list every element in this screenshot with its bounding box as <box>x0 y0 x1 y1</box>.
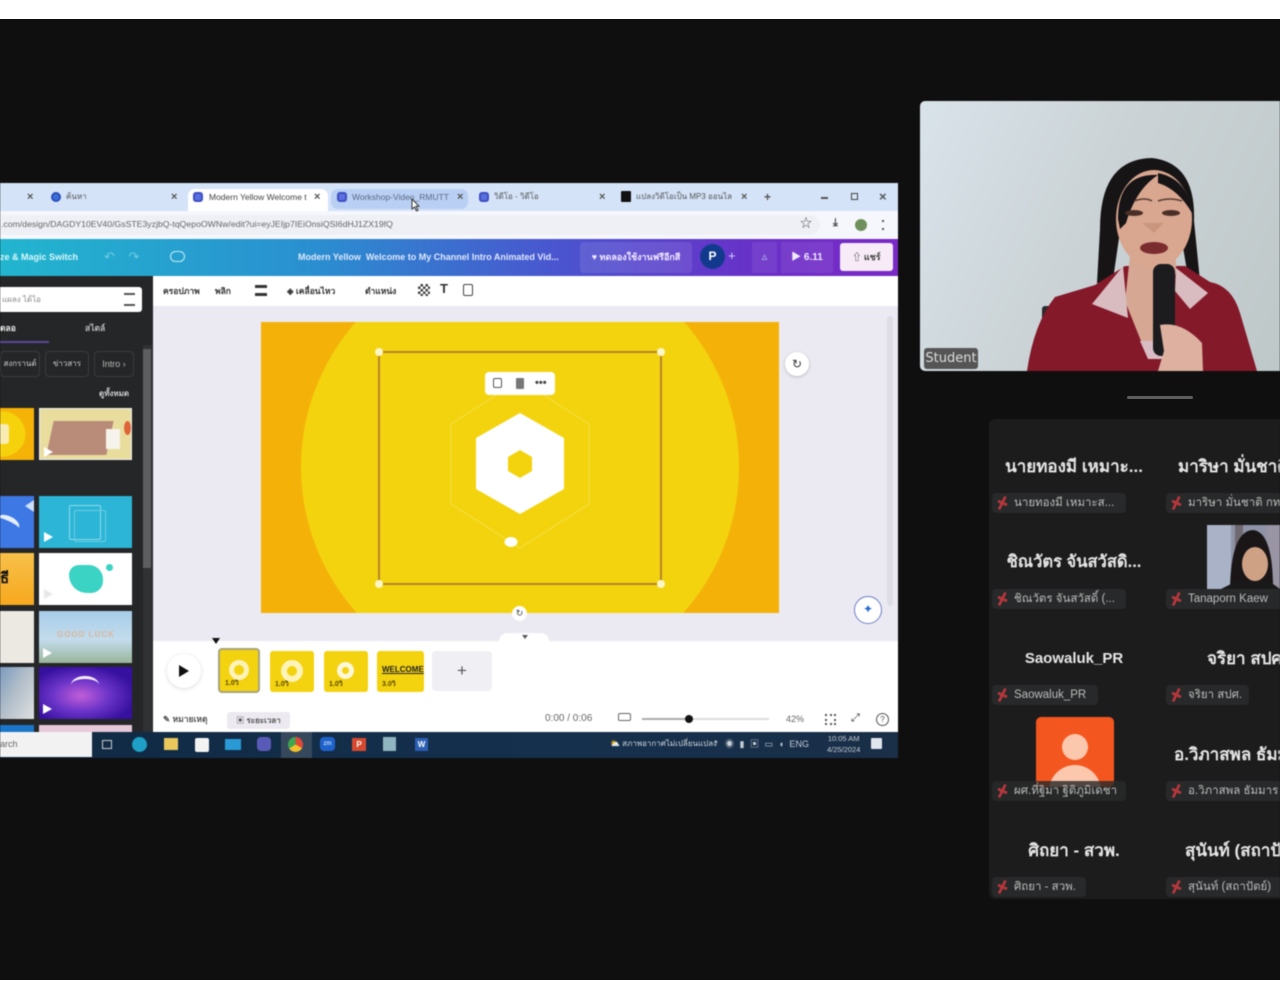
play mark <box>44 447 53 457</box>
play button <box>167 654 201 688</box>
tray icons: ⌃ ◉ ▮ ▣ ▭ ◖ ENG <box>712 739 809 749</box>
trash icon <box>516 378 524 389</box>
edge <box>132 737 147 752</box>
participant 8 <box>1166 745 1280 801</box>
design canvas <box>261 322 779 613</box>
notification icon <box>871 738 882 749</box>
tag: ศิถยา - สวพ. <box>1014 881 1076 893</box>
word: W <box>418 740 425 749</box>
chip: songkran <box>0 351 40 377</box>
powerpoint <box>352 738 366 751</box>
converter tab close: × <box>741 191 747 203</box>
sky title: GOOD LUCK <box>57 630 115 639</box>
menu dots <box>882 220 884 230</box>
selection box <box>378 351 662 585</box>
template: yellow <box>0 408 34 460</box>
template: purple <box>39 667 132 719</box>
tag <box>992 781 1126 801</box>
zoom knob <box>685 715 693 723</box>
section label: ดูทั้งหมด <box>99 389 129 398</box>
template: paper <box>0 611 34 663</box>
panel: participants <box>989 419 1280 899</box>
chip: news <box>45 351 89 377</box>
magic button: ✦ <box>863 602 873 616</box>
chart button: ▵ <box>762 251 767 263</box>
timeline <box>153 641 898 733</box>
avatar body <box>1049 765 1101 795</box>
tag <box>1166 877 1280 897</box>
taskbar <box>0 732 898 758</box>
zoom app: zm <box>324 741 332 747</box>
mail <box>225 739 241 750</box>
active tab icon <box>193 192 203 202</box>
floating toolbar <box>485 372 555 395</box>
hovered tab icon <box>337 192 347 202</box>
participant 2 <box>1166 453 1280 513</box>
chip: intro: Intro › <box>102 359 126 369</box>
page icon 3 <box>337 662 354 679</box>
red shape <box>124 421 131 435</box>
template: blue <box>0 496 34 548</box>
profile icon <box>855 219 867 231</box>
participant 1 <box>992 456 1143 513</box>
zoom percent: 42% <box>786 714 804 724</box>
avatar head <box>1062 734 1088 760</box>
rotate hint button <box>785 352 809 376</box>
filter icon <box>124 293 135 306</box>
speaker illustration <box>1026 157 1258 372</box>
participant 5 <box>992 650 1124 705</box>
active tab close: × <box>314 191 320 203</box>
chrome active <box>281 732 312 758</box>
hovered tab title: Workshop-Video_RMUTT <box>352 192 449 202</box>
clock: 4/25/2024 <box>827 745 860 754</box>
paint roller: T <box>440 281 448 296</box>
speaker name tag <box>924 348 978 369</box>
clock: 10:05 AM <box>828 734 860 743</box>
app <box>383 737 396 751</box>
tag <box>992 877 1086 897</box>
canvas scrollbar <box>887 316 893 606</box>
powerpoint: P <box>356 740 362 749</box>
context toolbar <box>153 276 898 306</box>
handle bottom right <box>657 580 665 588</box>
template: clouds <box>0 667 34 719</box>
lock icon <box>463 284 473 296</box>
tab title: converter: แปลงวิดีโอเป็น MP3 ออนไล <box>636 192 732 201</box>
active tab title: Modern Yellow Welcome t <box>209 192 307 202</box>
page icon 2 <box>281 660 303 682</box>
chip: songkran: สงกรานต์ <box>3 359 37 368</box>
tag: ผศ.ที่ฐิมา ฐิติภูมิเดชา <box>1014 785 1117 797</box>
lines icon <box>255 285 267 296</box>
participant 3 <box>992 552 1141 609</box>
panel: shared screen <box>0 183 898 758</box>
avatar <box>700 244 725 269</box>
template: photo <box>39 408 132 460</box>
teams <box>257 737 271 751</box>
corner mark <box>25 500 34 512</box>
scrollbar thumb <box>143 349 151 568</box>
tag: สุนันท์ (สถาปัตย์) <box>1188 881 1271 893</box>
tray weather: ⛅ สภาพอากาศไม่เปลี่ยนแปลง <box>610 739 717 748</box>
tag: ชิณวัตร จันสวัสดิ์ (... <box>1014 593 1115 605</box>
rotate handle <box>512 606 527 621</box>
chrome <box>288 737 303 752</box>
black glyph: ธี <box>0 570 9 587</box>
chart button <box>752 242 777 273</box>
name: ชิณวัตร จันสวัสดิ... <box>1007 553 1141 571</box>
rotate handle: ↻ <box>516 608 523 618</box>
notes label: ✎ หมายเหตุ <box>163 714 207 724</box>
zoom app <box>320 737 335 751</box>
playhead <box>212 638 220 644</box>
word <box>415 738 428 751</box>
duration button <box>227 712 290 729</box>
grid icon <box>825 714 836 725</box>
task view <box>102 740 112 749</box>
checker icon <box>418 284 430 296</box>
name: ศิถยา - สวพ. <box>1028 841 1120 860</box>
page 3: 1.0วิ <box>329 681 343 688</box>
template: partial blue <box>0 725 34 758</box>
flip label: พลิก <box>215 286 231 296</box>
star icon: ☆ <box>800 216 812 230</box>
handle top right <box>657 348 665 356</box>
sidebar tab labels: ดลอ <box>0 323 16 333</box>
search box: แผลง ได้ไอ <box>2 295 41 304</box>
url field <box>0 215 820 235</box>
position label: ตำแหน่ง <box>365 286 396 296</box>
handle bottom left <box>375 580 383 588</box>
page icon 1 <box>229 660 249 680</box>
white arc <box>71 676 99 694</box>
sidebar <box>0 276 153 758</box>
trial button <box>580 242 692 273</box>
monitor icon <box>618 713 631 721</box>
duration button: ▣ ระยะเวลา <box>236 716 281 725</box>
play mark <box>44 532 53 542</box>
help icon: ? <box>880 715 885 724</box>
add page <box>432 651 492 691</box>
participant 9 <box>992 841 1120 897</box>
more dots: ••• <box>535 377 547 389</box>
document title: Modern Yellow Welcome to My Channel Intro Animated Vid... <box>298 252 559 262</box>
tag: อ.วิภาสพล ธัมมาร <box>1188 785 1278 797</box>
tag: มาริษา มั่นชาติ กท <box>1188 497 1280 509</box>
participant 4 <box>1166 524 1280 609</box>
tag: จริยา สปศ. <box>1188 689 1242 701</box>
video tab icon <box>479 192 489 202</box>
participant 6 <box>1166 649 1280 705</box>
participant 10 <box>1166 840 1280 897</box>
play triangle <box>179 665 189 677</box>
template: white teal <box>39 553 132 605</box>
tab icon: converter <box>621 191 631 202</box>
note card <box>106 429 120 449</box>
avatar: P <box>708 249 716 263</box>
search field: arch <box>0 739 18 749</box>
teal frame <box>69 505 101 540</box>
canva toolbar <box>0 239 898 276</box>
animate label: ◈ เคลื่อนไหว <box>287 286 335 296</box>
chip: intro <box>94 351 134 377</box>
teal dot <box>106 564 113 571</box>
hexagon graphic <box>450 394 590 549</box>
browser tab bar <box>0 183 898 211</box>
new tab: + <box>764 190 771 204</box>
play outline <box>44 589 53 599</box>
scrollbar <box>143 345 152 758</box>
help icon <box>876 713 889 726</box>
time: 0:00 / 0:06 <box>545 713 592 724</box>
clock <box>826 734 861 754</box>
play button <box>781 242 833 273</box>
template: teal <box>39 496 132 548</box>
expand icon: ⤢ <box>851 712 860 724</box>
search field <box>0 732 92 757</box>
participant 7 <box>992 716 1126 800</box>
tab underline <box>0 341 49 343</box>
video tab close: × <box>599 191 605 203</box>
crop label: ครอปภาพ <box>163 286 200 296</box>
window restore <box>851 193 858 200</box>
template: sky <box>39 611 132 663</box>
hovered tab close: × <box>457 191 463 203</box>
add member: + <box>728 248 736 263</box>
url text: .com/design/DAGDY10EV40/GsSTE3yzjbQ-tqQepoOWNw/edit?ui=eyJEIjp7IEiOnsiQSI6dHJ1ZX19fQ <box>1 219 393 229</box>
page 1 selected: 1.0วิ <box>225 680 239 687</box>
timeline pages <box>217 647 425 694</box>
tab title: search: ค้นหา <box>66 192 87 201</box>
page 3 <box>324 651 368 692</box>
page 1 selected <box>218 648 260 693</box>
page 2: 1.0วิ <box>275 681 289 688</box>
tag <box>992 589 1126 609</box>
cloud icon <box>170 251 185 262</box>
window minimize <box>821 197 828 198</box>
explorer <box>164 738 178 750</box>
timeline notch <box>499 633 549 641</box>
white arc <box>0 512 22 534</box>
speaker name tag: Student <box>925 351 977 366</box>
tag: Saowaluk_PR <box>1014 689 1086 701</box>
welcome label: WELCOME <box>382 665 424 674</box>
window close: × <box>879 189 887 204</box>
share button: ⇧ แชร์ <box>852 252 881 262</box>
avatar <box>1036 717 1114 787</box>
page 4: 3.0วิ <box>382 681 396 688</box>
inner teal frame <box>74 510 106 542</box>
resize label: ze & Magic Switch <box>0 252 78 262</box>
magic button <box>854 596 882 624</box>
play mark <box>43 648 52 658</box>
style tab: สไตล์ <box>85 323 105 333</box>
add page: + <box>457 661 467 680</box>
zoom slider <box>642 718 769 720</box>
address bar <box>0 211 898 239</box>
name: นายทองมี เหมาะ... <box>1005 457 1143 476</box>
tag <box>1166 685 1249 705</box>
tag <box>992 493 1126 513</box>
template: orange <box>0 553 34 605</box>
trial button: ♥ ทดลองใช้งานฟรีอีกสี <box>592 252 680 262</box>
tab title: video: วิดีโอ - วิดีโอ <box>494 192 539 201</box>
play button: ▶ 6.11 <box>791 252 823 263</box>
search box <box>0 287 142 312</box>
handle top left <box>375 348 383 356</box>
name: Saowaluk_PR <box>1025 650 1123 667</box>
chip: news: ข่าวสาร <box>53 359 81 368</box>
store <box>195 738 209 752</box>
download icon: ⤓ <box>833 217 838 229</box>
mouse cursor <box>410 198 420 212</box>
participant photo <box>1206 524 1280 590</box>
zoom slider filled <box>642 718 687 720</box>
tag <box>1166 493 1280 513</box>
teal blob <box>69 565 103 593</box>
tag <box>1166 589 1280 609</box>
tag <box>1166 781 1280 801</box>
canvas area <box>153 306 898 641</box>
yellow circle <box>301 248 739 686</box>
tab icon: search <box>51 192 61 202</box>
rotate hint button: ↻ <box>792 357 802 371</box>
undo redo: ↶ ↷ <box>104 249 139 264</box>
tab close 2: × <box>171 191 177 203</box>
panel: speaker video <box>920 101 1280 371</box>
tag <box>992 685 1098 705</box>
tab close 1: × <box>27 191 33 203</box>
play mark <box>43 704 52 714</box>
page 2 <box>270 651 314 692</box>
sidebar collapse handle <box>153 480 160 525</box>
photo centre <box>46 421 114 455</box>
share button <box>840 243 893 271</box>
hovered tab <box>331 189 468 209</box>
white hexagon hint <box>0 424 9 444</box>
page 4 <box>377 651 424 692</box>
tag: นายทองมี เหมาะส... <box>1014 497 1114 509</box>
active tab <box>188 189 328 212</box>
copy icon <box>493 378 502 388</box>
notch caret <box>522 635 528 639</box>
divider handle <box>1127 396 1193 399</box>
template: partial <box>39 725 132 758</box>
tag: Tanaporn Kaew <box>1188 593 1268 605</box>
